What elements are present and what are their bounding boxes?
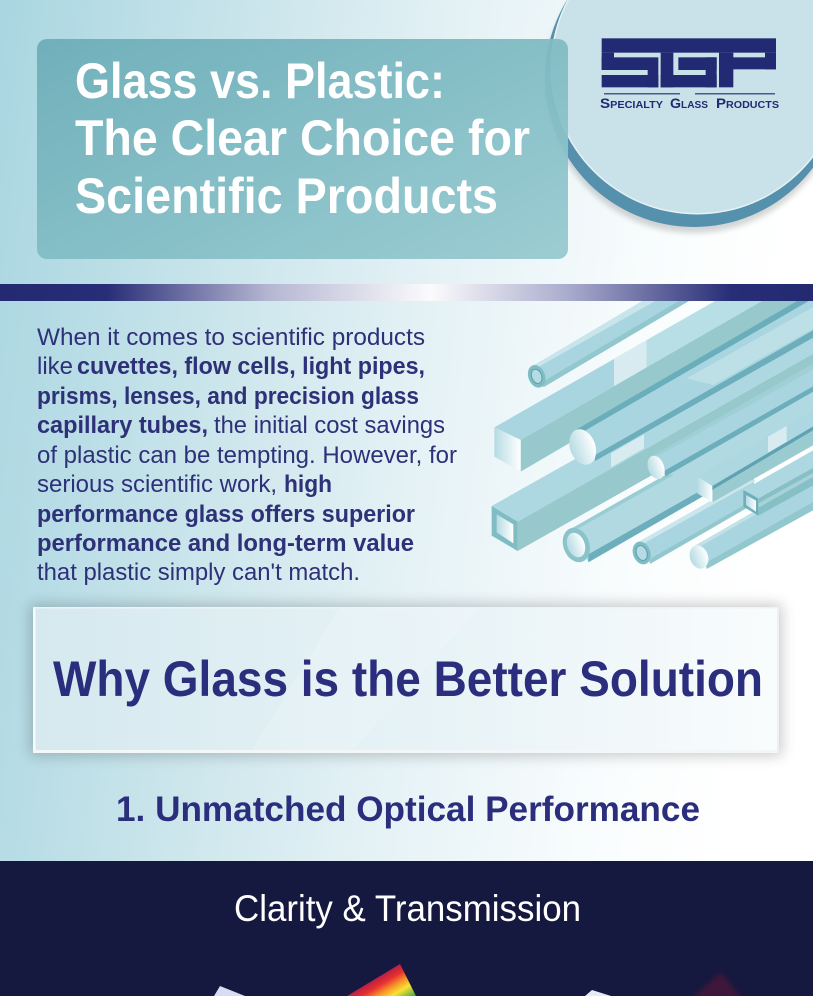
illustration: glass rods and tubes xyxy=(492,298,813,571)
rod: large cylinder xyxy=(564,298,813,469)
logo lens circle xyxy=(545,0,813,233)
intro paragraph: cuvettes, flow cells, light pipes, xyxy=(77,353,425,380)
icon: right prism tip xyxy=(585,990,611,996)
rod: small front rod xyxy=(690,486,813,569)
intro paragraph: capillary tubes, xyxy=(37,412,208,439)
title text xyxy=(75,53,530,224)
bar: small hollow square xyxy=(743,448,813,516)
dark section panel xyxy=(0,861,813,996)
intro paragraph: the initial cost savings xyxy=(214,412,445,439)
intro paragraph: that plastic simply can't match. xyxy=(37,559,360,586)
logo wordmark: SPECIALTY xyxy=(600,95,663,111)
title text: Glass vs. Plastic: xyxy=(75,53,445,109)
intro paragraph: prisms, lenses, and precision glass xyxy=(37,383,419,410)
logo wordmark: GLASS xyxy=(670,95,708,111)
intro paragraph: When it comes to scientific products xyxy=(37,324,425,351)
bar: solid square xyxy=(494,298,813,472)
icon: left prism tip xyxy=(214,986,245,996)
icon: left rainbow beam xyxy=(347,964,416,996)
title panel xyxy=(37,39,568,259)
title text: Scientific Products xyxy=(75,168,498,224)
logo wordmark: PRODUCTS xyxy=(716,95,779,111)
title text: The Clear Choice for xyxy=(75,110,530,166)
gradient divider band xyxy=(0,284,813,301)
intro paragraph xyxy=(37,324,457,586)
tube: large front tube xyxy=(558,388,813,566)
intro paragraph: of plastic can be tempting. However, for xyxy=(37,442,457,469)
intro paragraph: like xyxy=(37,353,73,380)
logo wordmark xyxy=(600,95,779,111)
bar: small solid square xyxy=(697,426,813,502)
tube: top thin tube xyxy=(525,298,693,390)
glass heading panel xyxy=(30,604,782,756)
heading text: Why Glass is the Better Solution xyxy=(53,651,763,707)
section heading: 1. Unmatched Optical Performance xyxy=(116,790,700,829)
intro paragraph: serious scientific work, xyxy=(37,471,277,498)
bar: hollow large square xyxy=(492,322,813,551)
icon: right dim beam xyxy=(691,972,742,996)
rod: middle cylinder xyxy=(644,362,813,481)
intro paragraph: performance and long-term value xyxy=(37,530,414,557)
intro paragraph: high xyxy=(284,471,332,498)
subsection heading: Clarity & Transmission xyxy=(234,888,581,929)
tube: small front tube xyxy=(630,477,757,567)
SGP logo xyxy=(600,38,779,111)
intro paragraph: performance glass offers superior xyxy=(37,501,415,528)
